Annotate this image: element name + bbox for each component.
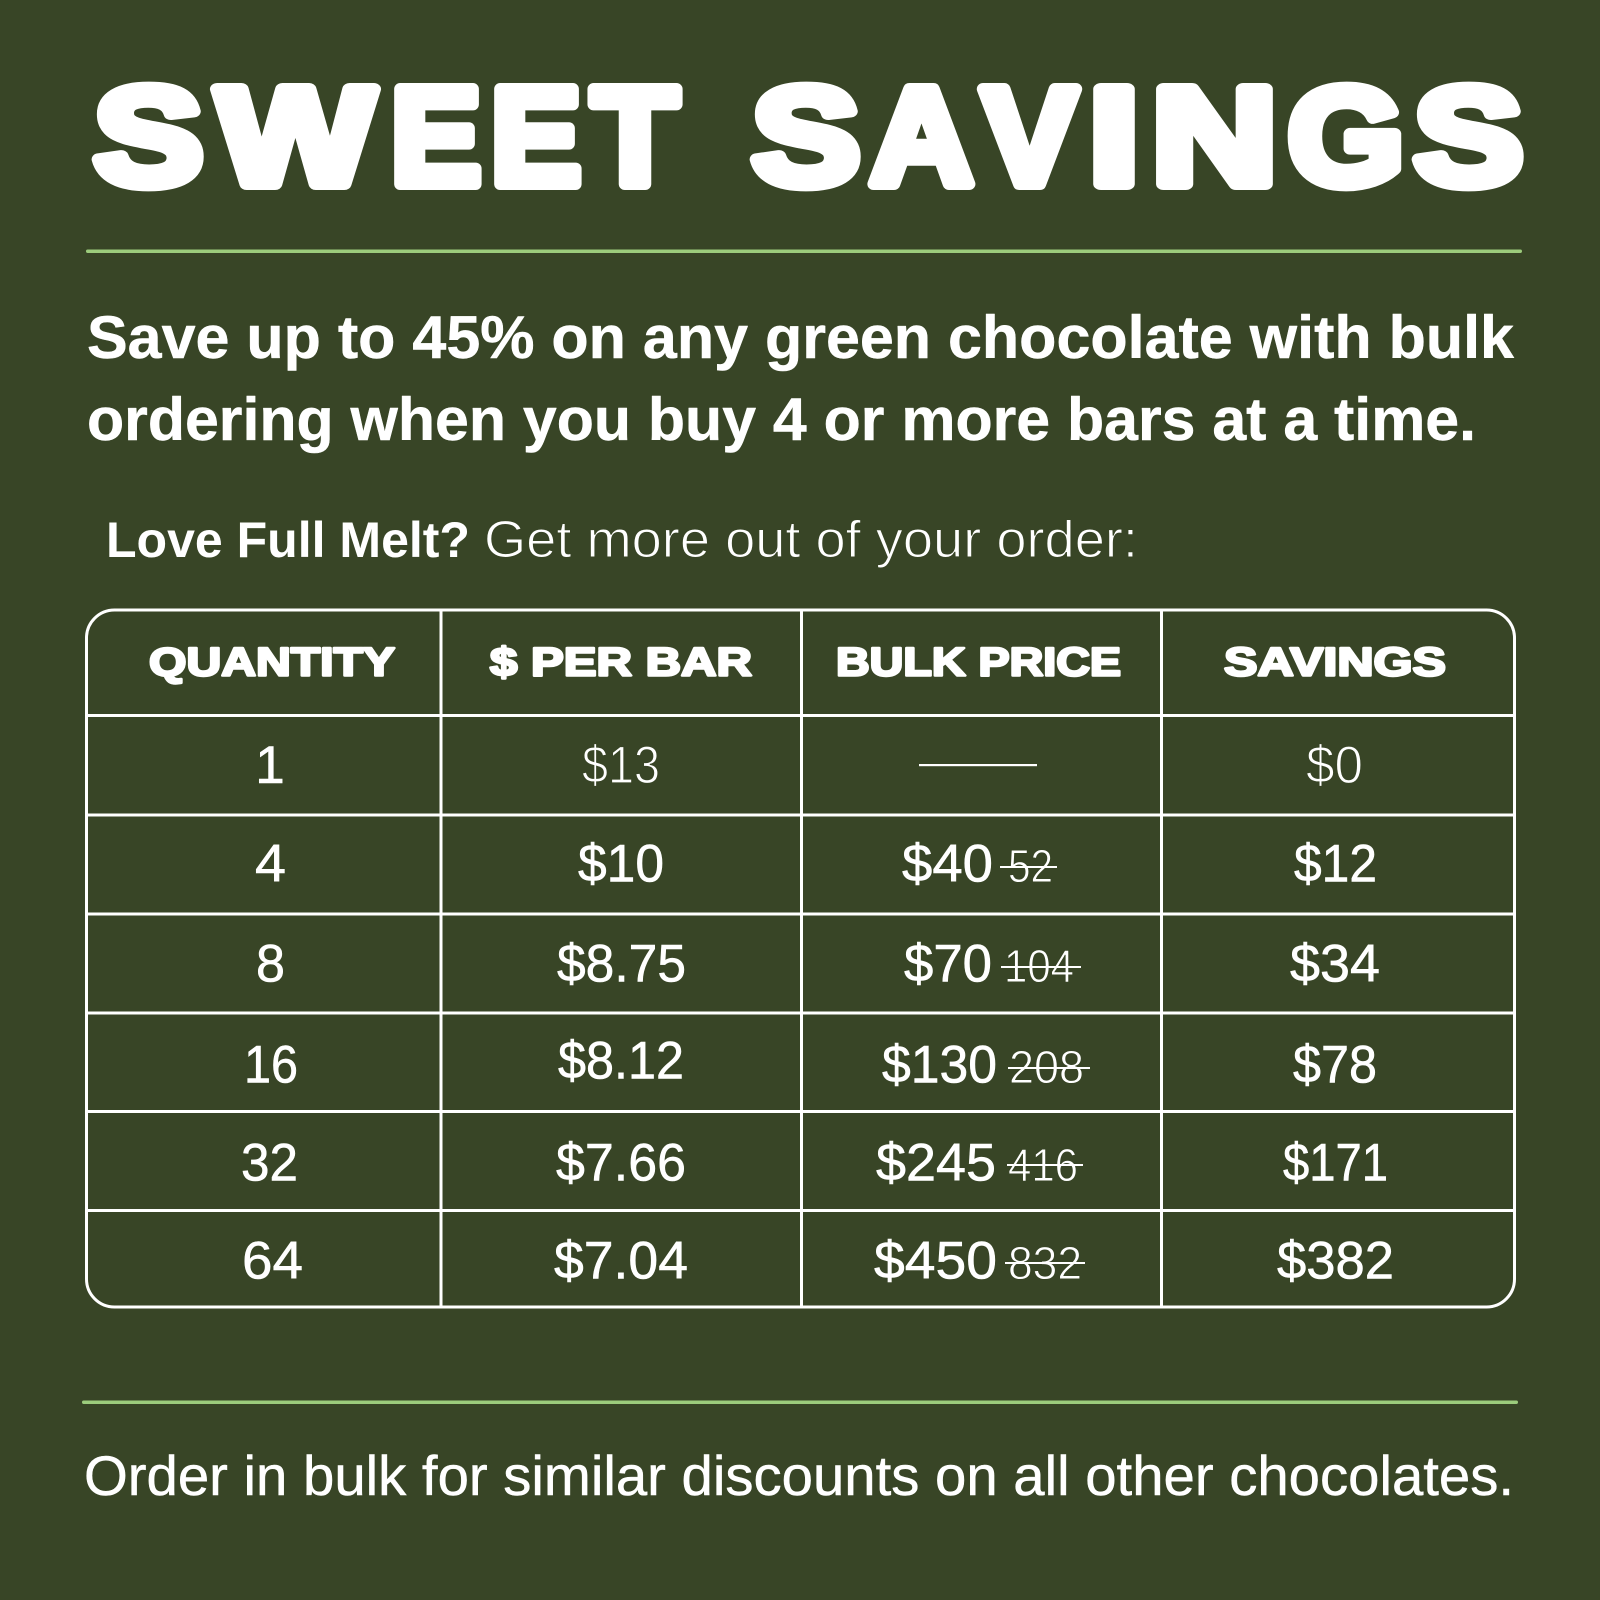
row: quantity 32: $171 bbox=[1283, 1134, 1388, 1192]
row: quantity 64: $382 bbox=[1277, 1232, 1394, 1290]
row: quantity 16: $130 bbox=[882, 1036, 997, 1094]
row: quantity 4: 4 bbox=[255, 834, 286, 894]
bottom divider bbox=[82, 1400, 1518, 1404]
row: quantity 32: $7.66 bbox=[556, 1134, 686, 1192]
table header row bbox=[149, 640, 1446, 684]
row: quantity 1: 1 bbox=[255, 736, 285, 795]
row: quantity 4: $12 bbox=[1294, 834, 1377, 894]
table header row: SAVINGS bbox=[1224, 640, 1446, 684]
intro text: Save up to 45% on any green chocolate with bulk bbox=[87, 304, 1515, 371]
table header row: $ PER BAR bbox=[490, 640, 752, 684]
title: I bbox=[1089, 60, 1139, 214]
row: quantity 16: $8.12 bbox=[558, 1032, 684, 1090]
intro text bbox=[87, 304, 1515, 453]
row: quantity 4 bbox=[255, 834, 1377, 894]
footer note: Order in bulk for similar discounts on all other chocolates. bbox=[84, 1444, 1514, 1507]
row: quantity 4: $10 bbox=[578, 834, 664, 894]
table lead-in bbox=[106, 511, 1138, 569]
row: quantity 8: 104 bbox=[1004, 940, 1074, 992]
row: quantity 64 bbox=[242, 1232, 1394, 1290]
row: quantity 16: 208 bbox=[1009, 1041, 1084, 1093]
title: G bbox=[1288, 60, 1404, 214]
row: quantity 16: 16 bbox=[244, 1036, 298, 1094]
row: quantity 8: 8 bbox=[256, 934, 285, 994]
row: quantity 32 bbox=[241, 1134, 1388, 1192]
row: quantity 8: $70 bbox=[904, 934, 992, 994]
row: quantity 1 bbox=[255, 736, 1363, 795]
row: quantity 8: $8.75 bbox=[557, 934, 686, 994]
title: E bbox=[391, 60, 481, 214]
title: T bbox=[592, 60, 678, 214]
row: quantity 16 bbox=[244, 1032, 1377, 1094]
title: A bbox=[870, 60, 973, 214]
row: quantity 64: 832 bbox=[1008, 1237, 1082, 1289]
row: quantity 64: $7.04 bbox=[554, 1232, 688, 1290]
row: quantity 1: $13 bbox=[582, 736, 660, 795]
intro text: ordering when you buy 4 or more bars at a time. bbox=[87, 386, 1476, 453]
title: S bbox=[94, 60, 203, 214]
row: quantity 64: 64 bbox=[242, 1232, 303, 1290]
title: W bbox=[217, 60, 375, 214]
table header row: QUANTITY bbox=[149, 640, 395, 684]
table lead-in: Get more out of your order: bbox=[484, 511, 1138, 569]
row: quantity 1: $0 bbox=[1306, 736, 1363, 795]
title: N bbox=[1152, 60, 1277, 214]
title: E bbox=[491, 60, 581, 214]
table grid bbox=[86, 610, 1514, 1307]
row: quantity 64: $450 bbox=[874, 1232, 997, 1290]
top divider bbox=[86, 250, 1522, 253]
row: quantity 4: $40 bbox=[902, 834, 993, 894]
table header row: BULK PRICE bbox=[836, 640, 1121, 684]
row: quantity 32: 416 bbox=[1008, 1139, 1078, 1191]
table lead-in: Love Full Melt? bbox=[106, 512, 470, 568]
row: quantity 16: $78 bbox=[1293, 1036, 1377, 1094]
row: quantity 32: 32 bbox=[241, 1134, 298, 1192]
title: S bbox=[752, 60, 860, 214]
title: V bbox=[982, 60, 1077, 214]
title: S bbox=[1414, 60, 1523, 214]
row: quantity 32: $245 bbox=[876, 1134, 996, 1192]
row: quantity 8 bbox=[256, 934, 1380, 994]
pricing table bbox=[86, 610, 1514, 1307]
row: quantity 4: 52 bbox=[1008, 840, 1053, 892]
row: quantity 8: $34 bbox=[1290, 934, 1380, 994]
